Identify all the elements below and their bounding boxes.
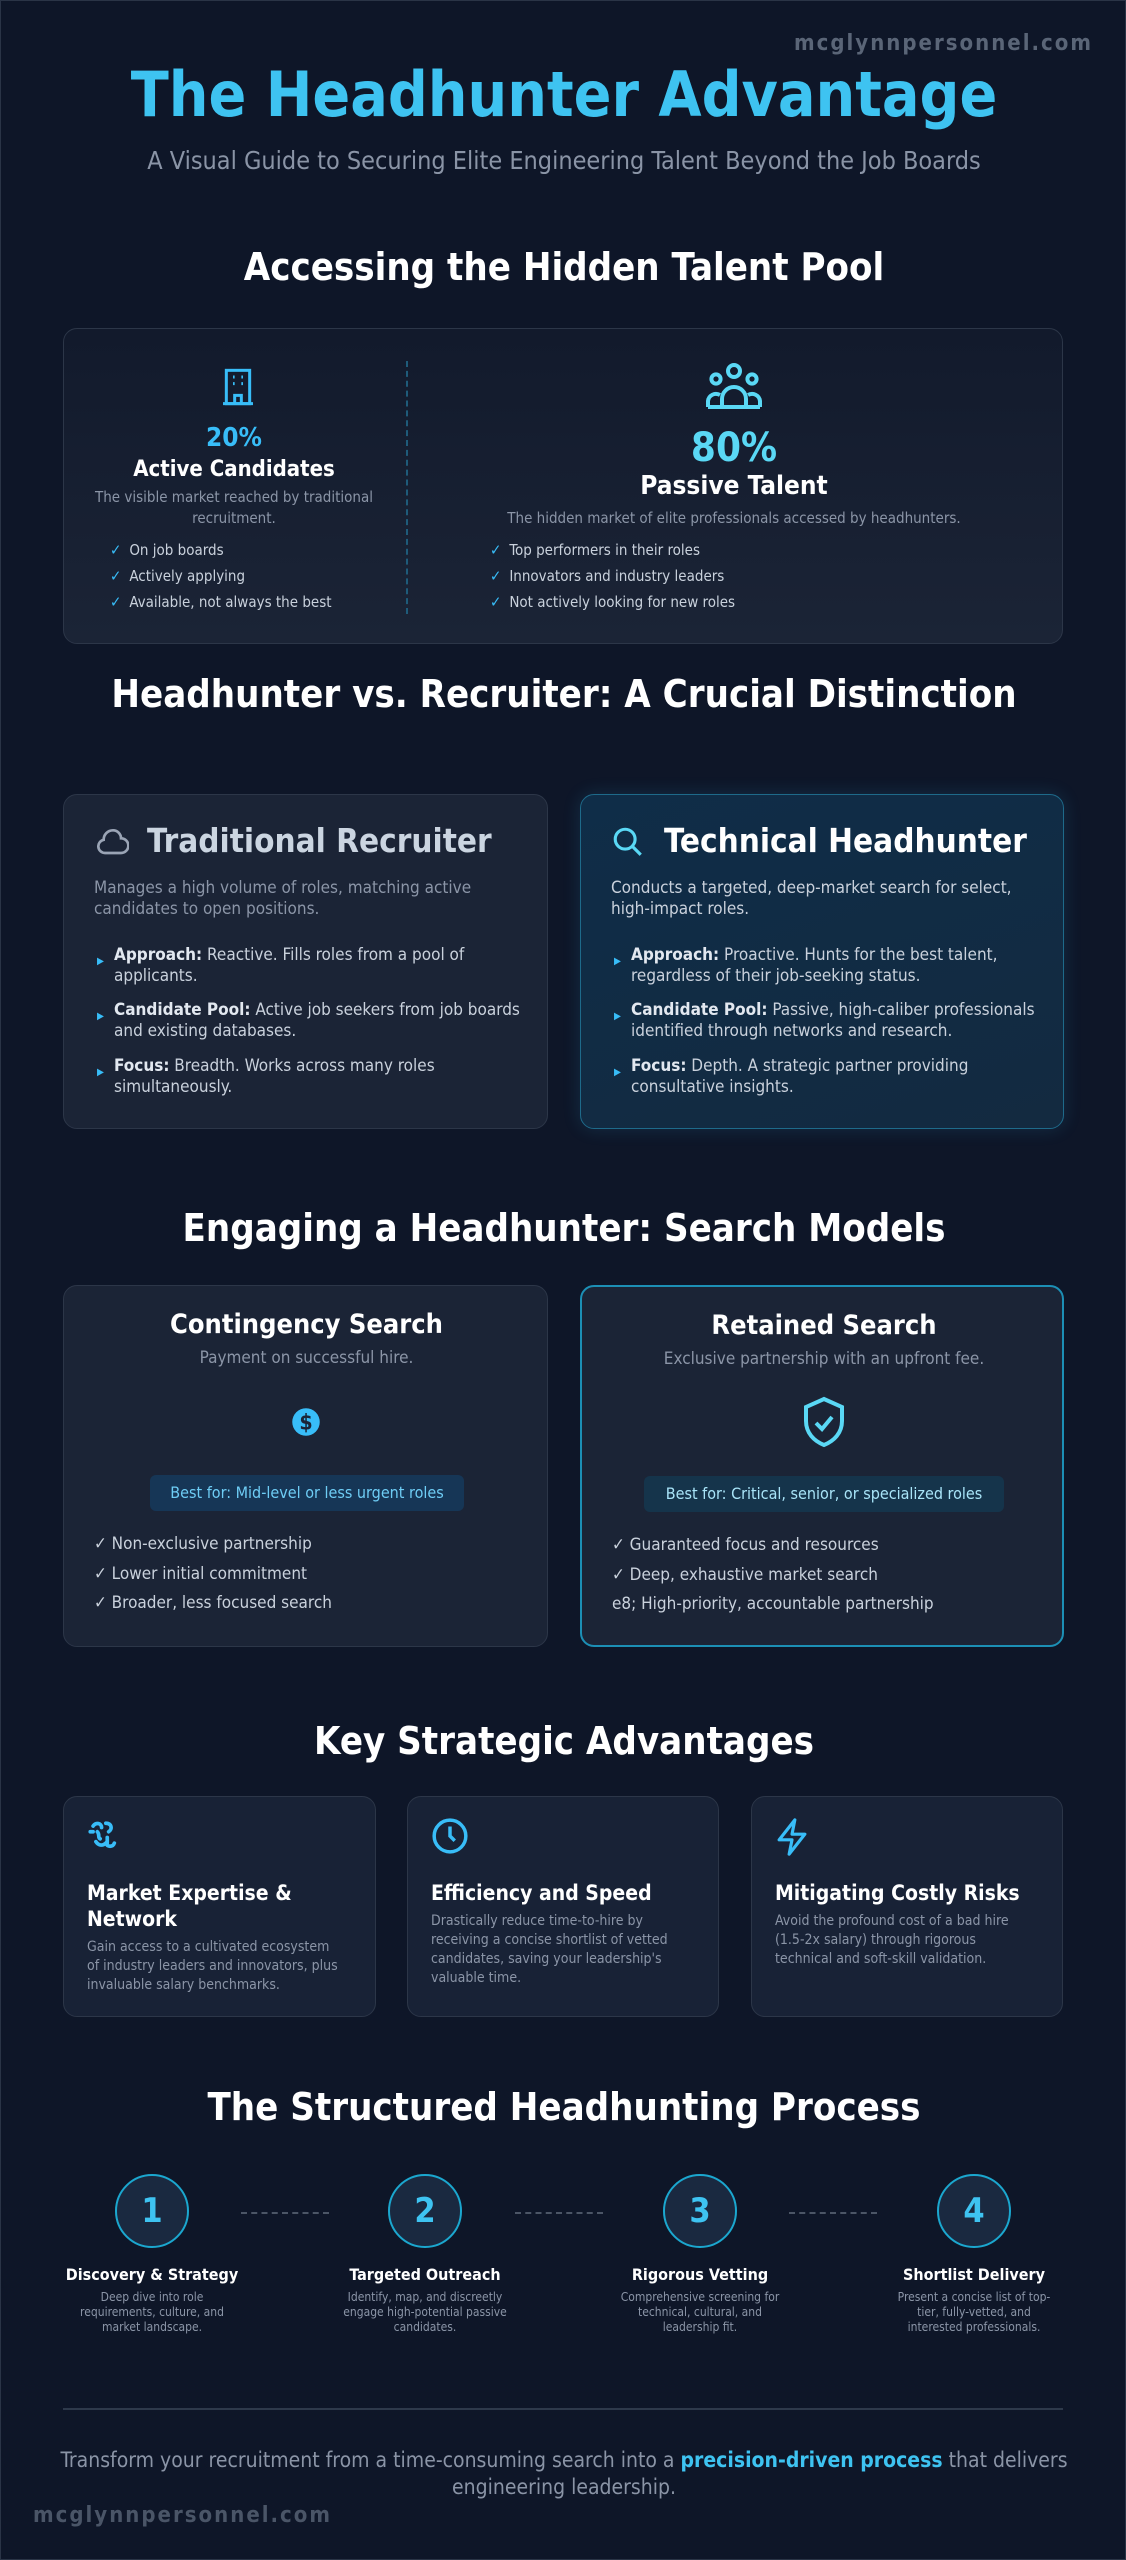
card: technical headhunter [580,794,1064,1129]
card: retained search: ✓ Deep, exhaustive market search [612,1565,878,1585]
left column: active candidates: The visible market reached by traditional recruitment. [95,488,373,527]
icon: search [614,828,642,856]
step 2: Targeted Outreach [349,2265,501,2284]
card: technical headhunter: ▶ [614,956,621,967]
card: risks [751,1796,1063,2017]
heading: search models: Engaging a Headhunter: Search Models [183,1206,945,1250]
pill: Best for: Mid-level or less urgent roles [170,1483,444,1502]
right column: passive talent: The hidden market of elite professionals accessed by headhunters. [507,509,961,527]
right column: passive talent: ✓ Top performers in their roles [490,541,700,559]
heading: distinction: Headhunter vs. Recruiter: A Crucial Distinction [111,672,1017,716]
watermark top: mcglynnpersonnel.com [794,31,1093,56]
card: technical headhunter: Conducts a targeted, deep-market search for select, high-impact roles. [611,878,1012,919]
card: efficiency: Efficiency and Speed [431,1881,652,1905]
card: traditional recruiter: ▶ [97,956,104,967]
card: traditional recruiter [63,794,548,1129]
card: traditional recruiter: ▶ [97,1011,104,1022]
left column: active candidates: ✓ On job boards [110,541,224,559]
step 2 [343,2174,507,2334]
step 1 [66,2174,238,2334]
title: The Headhunter Advantage [131,58,997,131]
step 3 [621,2174,780,2334]
card: technical headhunter: ▶ [614,1011,621,1022]
left column: active candidates [95,368,373,611]
card: retained search: Retained Search [711,1310,937,1341]
icon: clock [432,1818,468,1854]
card: contingency search [63,1285,548,1647]
card: traditional recruiter: Focus: Breadth. Works across many roles simultaneously. [114,1056,435,1097]
step 3: Rigorous Vetting [632,2265,768,2284]
card: risks: Mitigating Costly Risks [775,1881,1020,1905]
step 1: Discovery & Strategy [66,2265,238,2284]
subtitle: A Visual Guide to Securing Elite Engineering Talent Beyond the Job Boards [147,146,981,175]
step 4 [898,2174,1050,2334]
card: market expertise: Market Expertise & Network [87,1881,292,1931]
card: risks: Avoid the profound cost of a bad hire [775,1913,1009,1929]
step 3: Comprehensive screening for technical, cultural, and leadership fit. [621,2290,779,2334]
card: market expertise: Gain access to a cultivated ecosystem [87,1939,329,1955]
left column: active candidates: ✓ Actively applying [110,567,245,585]
card: efficiency: Drastically reduce time-to-hire by receiving a concise shortlist of vetted candidates, saving your leadership's valuable time. [431,1913,668,1986]
icon: lightning [778,1818,806,1856]
card: contingency search: ✓ Broader, less focused search [94,1593,332,1613]
icon: shield check [804,1396,844,1448]
card: contingency search: Payment on successful hire. [200,1348,413,1368]
left column: active candidates: ✓ Available, not always the best [110,593,332,611]
card: traditional recruiter: ▶ [97,1067,104,1078]
right column: passive talent: ✓ Not actively looking for new roles [490,593,735,611]
card: efficiency [407,1796,719,2017]
step 4: Shortlist Delivery [903,2265,1045,2284]
left column: active candidates: Active Candidates [133,457,335,482]
icon: dollar: $ [299,1410,313,1435]
card: market expertise: of industry leaders and innovators, plus invaluable salary benchmarks. [87,1958,338,1993]
icon: group [706,363,762,409]
icon: cloud [97,829,129,854]
card: contingency search: ✓ Non-exclusive partnership [94,1534,312,1554]
card: technical headhunter: Candidate Pool: Passive, high-caliber professionals identified through networks and research. [631,1000,1035,1041]
watermark bottom: mcglynnpersonnel.com [33,2503,332,2528]
step 2: Identify, map, and discreetly engage high-potential passive candidates. [343,2290,507,2334]
step 1: Deep dive into role requirements, culture, and market landscape. [80,2290,224,2334]
pill: Best for: Critical, senior, or specialized roles [666,1484,982,1503]
card: contingency search: Contingency Search [170,1309,443,1340]
card: technical headhunter: Focus: Depth. A strategic partner providing consultative insights. [631,1056,968,1097]
heading: hidden talent pool: Accessing the Hidden Talent Pool [244,245,884,289]
card: risks: (1.5-2x salary) through rigorous technical and soft-skill validation. [775,1932,986,1967]
card: technical headhunter: ▶ [614,1067,621,1078]
left column: active candidates: 20% [206,423,262,453]
card: retained search: e8; High-priority, accountable partnership [612,1594,934,1614]
footer statement: Transform your recruitment from a time-consuming search into a precision-driven process that delivers engineering leadership. [60,2448,1068,2499]
heading: key advantages: Key Strategic Advantages [314,1719,814,1763]
card: retained search: Exclusive partnership with an upfront fee. [664,1349,984,1369]
heading: process: The Structured Headhunting Process [207,2085,921,2129]
card: traditional recruiter: Candidate Pool: Active job seekers from job boards and existing databases. [114,1000,520,1041]
process steps [66,2174,1050,2334]
step 4: 4 [963,2191,985,2231]
right column: passive talent: ✓ Innovators and industry leaders [490,567,724,585]
step 4: Present a concise list of top-tier, fully-vetted, and interested professionals. [898,2290,1050,2334]
right column: passive talent [490,363,961,611]
step 1: 1 [141,2191,163,2231]
right column: passive talent: 80% [691,425,777,471]
card: retained search [580,1285,1064,1647]
panel: talent pool [63,328,1063,644]
step 2: 2 [414,2191,436,2231]
card: traditional recruiter: Manages a high volume of roles, matching active candidates to open positions. [94,878,471,919]
right column: passive talent: Passive Talent [640,471,828,501]
card: technical headhunter: Approach: Proactive. Hunts for the best talent, regardless of their job-seeking status. [631,945,998,986]
card: contingency search: ✓ Lower initial commitment [94,1564,307,1584]
card: retained search: ✓ Guaranteed focus and resources [612,1535,879,1555]
icon: network [88,1821,116,1848]
card: traditional recruiter: Traditional Recruiter [147,821,492,860]
card: technical headhunter: Technical Headhunter [664,821,1027,860]
icon: building [223,368,253,406]
pill [644,1476,1004,1512]
card: traditional recruiter: Approach: Reactive. Fills roles from a pool of applicants. [114,945,464,986]
card: market expertise [63,1796,376,2017]
icon: dollar [292,1408,320,1436]
step 3: 3 [689,2191,711,2231]
pill [150,1475,464,1511]
